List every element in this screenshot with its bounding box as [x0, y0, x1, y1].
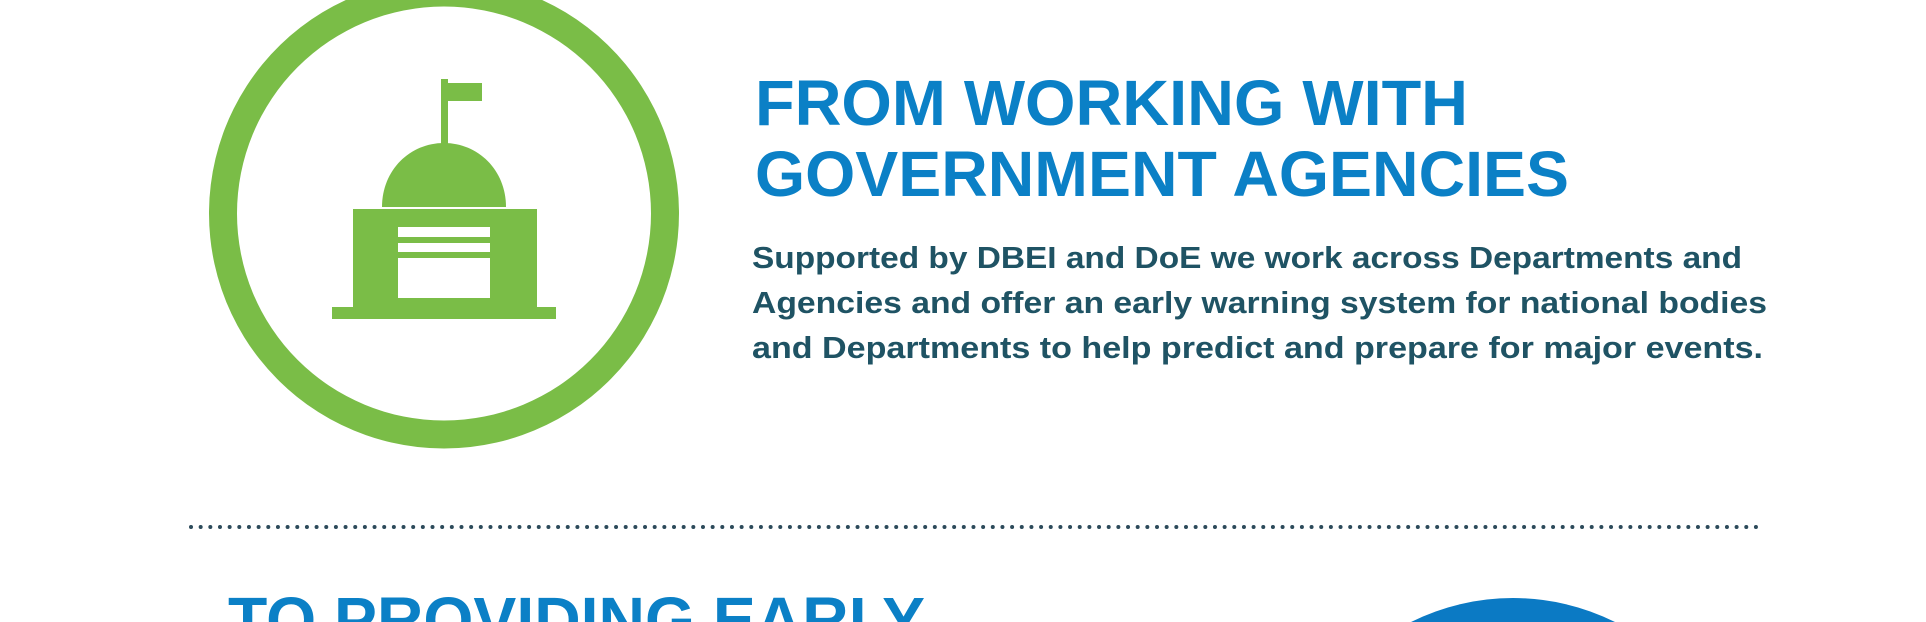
icon: building body with window — [332, 209, 556, 319]
blue circle (clipped by page edge) — [1411, 598, 1615, 622]
body text — [752, 240, 1767, 365]
body text: Agencies and offer an early warning system for national bodies — [752, 285, 1767, 320]
icon: dome — [382, 143, 506, 207]
icon: government building in green ring — [209, 0, 679, 448]
icon ring — [209, 0, 679, 448]
dotted divider — [191, 525, 1757, 529]
body text: Supported by DBEI and DoE we work across Departments and — [752, 240, 1742, 275]
heading line 1: FROM WORKING WITH — [755, 67, 1468, 139]
icon: flag on pole — [441, 79, 482, 144]
heading line 2: GOVERNMENT AGENCIES — [755, 138, 1569, 210]
body text: and Departments to help predict and prepare for major events. — [752, 330, 1763, 365]
